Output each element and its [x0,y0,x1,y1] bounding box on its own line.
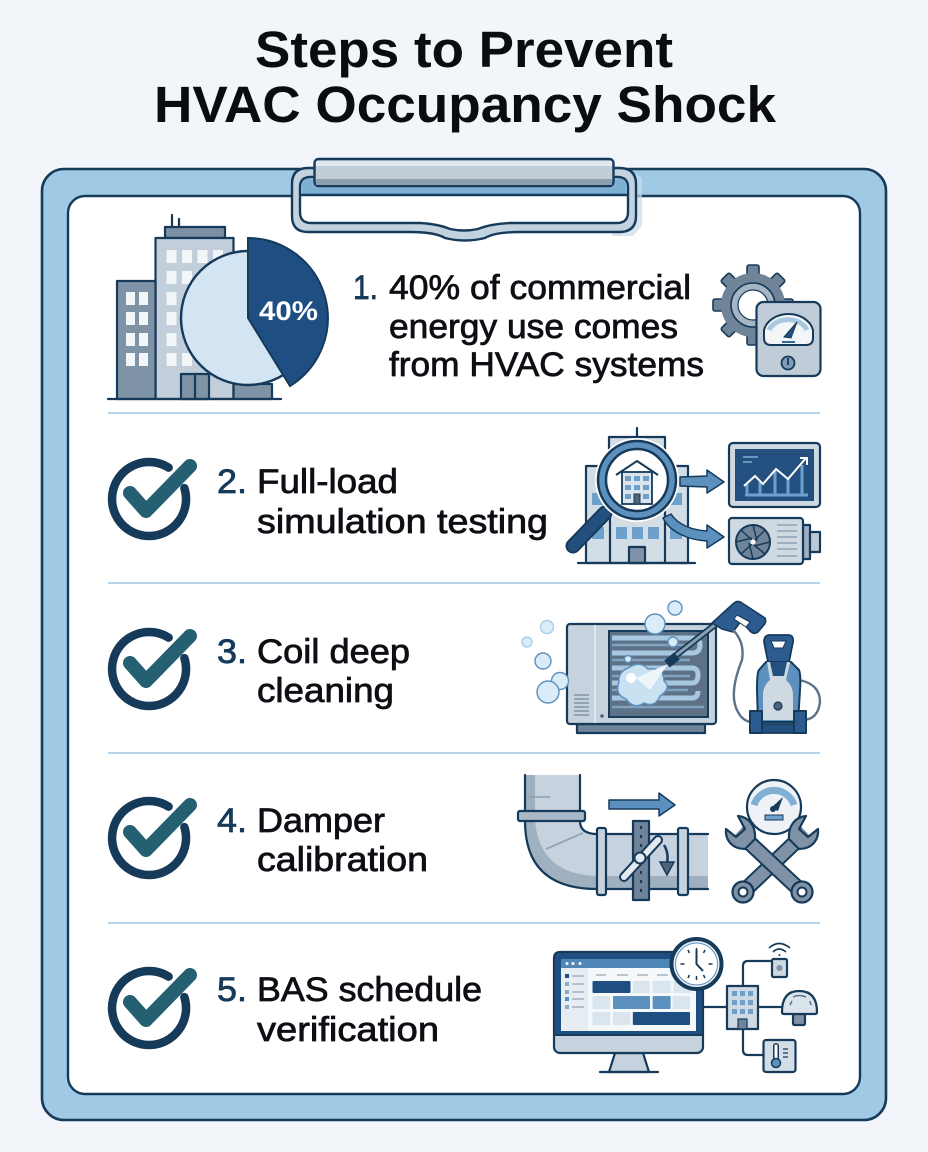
text: step 2 [217,463,548,541]
text: step 4 [217,802,428,879]
arrow: airflow [609,793,675,816]
icon: gear and gauge [713,265,820,376]
icon: check mark [112,632,190,706]
text: step 3: cleaning [257,672,394,710]
icon: clock [672,939,722,989]
title: HVAC Occupancy Shock [154,76,777,133]
item 5 row [112,939,817,1072]
icon: office buildings [108,215,281,399]
icon: building controller [727,986,758,1029]
text: step 5: verification [257,1011,439,1049]
icon: check mark [112,462,190,536]
icon: wireless sensor [769,944,790,977]
text: step 1: energy use comes [389,308,678,346]
title: Steps to Prevent [255,21,673,78]
icon: clipboard clip [292,159,642,240]
panel: clipboard board [42,169,886,1120]
text: step 4: Damper [257,802,385,840]
text: step 5: 5. [217,971,247,1009]
icon: duct with damper [518,775,708,900]
icon: pressure wand [667,602,766,722]
icon: monitor with chart [729,443,820,507]
text: step 5 [217,971,482,1049]
divider [108,412,820,414]
item 2 row [112,428,820,564]
divider [108,752,820,754]
icon: crossed wrenches [726,816,818,902]
title [154,21,777,133]
text: step 1: 40% of commercial [389,269,691,307]
arrow: to monitor [680,470,724,493]
divider [108,582,820,584]
text: step 3 [217,633,410,710]
text: step 1: from HVAC systems [389,346,704,384]
arrow: to air handler [663,514,724,548]
icon: pressure washer [750,635,820,733]
icon: monitor with schedule [554,952,703,1072]
chart: 40 percent pie: 40% [259,296,318,326]
icon: bubbles [522,601,682,703]
text: step 4: calibration [257,841,428,879]
text: step 2: Full-load [257,463,398,501]
text: step 3: Coil deep [257,633,410,671]
text: step 2: 2. [217,463,247,501]
item 3 row [112,601,820,733]
text: step 2: simulation testing [257,503,548,541]
text: step 1 [353,269,704,384]
icon: building under magnifier [573,428,695,563]
text: step 1: 1. [353,269,378,307]
icon: thermostat [764,1040,796,1072]
icon: ceiling sensor dome [782,991,817,1025]
icon: foam spray [618,664,668,706]
item 4 row [112,775,818,902]
chart: 40 percent pie [181,238,328,386]
icon: coil unit [567,624,716,733]
icon: check mark [112,971,190,1045]
text: step 3: 3. [217,633,247,671]
icon: gauge [747,780,801,834]
text: step 5: BAS schedule [257,971,482,1009]
text: step 4: 4. [217,802,247,840]
divider [108,922,820,924]
item 1 row [108,215,820,399]
icon: network connectors [703,961,782,1055]
icon: check mark [112,801,190,875]
icon: air handler fan unit [729,518,820,564]
